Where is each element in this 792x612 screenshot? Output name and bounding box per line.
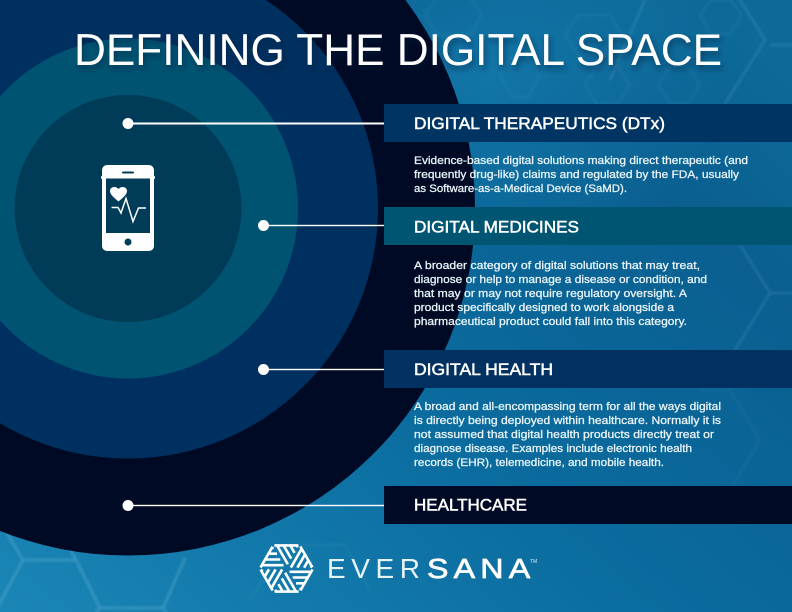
- panel: digital therapeutics: [384, 104, 792, 195]
- connector: digital health: [258, 364, 384, 375]
- heading: healthcare: HEALTHCARE: [414, 496, 527, 514]
- heading: digital health: DIGITAL HEALTH: [414, 361, 553, 379]
- logo: EVERSANA wordmark: SANA: [427, 554, 535, 584]
- text: digital medicines description: product specifically designed to work alongside a: [414, 302, 675, 314]
- text: digital medicines description: diagnose or help to manage a disease or condition, and: [414, 274, 707, 286]
- text: digital medicines description: A broader category of digital solutions that may treat,: [414, 260, 700, 272]
- text: digital medicines description: [414, 260, 707, 328]
- icon: smartphone with heart and pulse: [101, 165, 155, 251]
- text: digital therapeutics description: [414, 155, 748, 195]
- circle: digital therapeutics: [14, 95, 242, 322]
- title: DEFINING THE DIGITAL SPACE: [74, 26, 722, 75]
- text: digital health description: [414, 401, 722, 469]
- text: digital health description: records (EHR), telemedicine, and mobile health.: [414, 457, 664, 469]
- connector: healthcare: [122, 500, 384, 511]
- logo: EVERSANA mark: [255, 535, 318, 602]
- text: digital medicines description: that may or may not require regulatory oversight. A: [414, 288, 688, 300]
- text: digital health description: is directly being deployed within healthcare. Normally it is: [414, 415, 722, 427]
- circle: healthcare: [0, 0, 475, 556]
- text: digital therapeutics description: frequently drug-like) claims and regulated by the FDA, usually: [414, 169, 740, 181]
- connector: digital medicines: [258, 220, 384, 231]
- logo: EVERSANA wordmark: EVER: [327, 553, 420, 584]
- panel: digital health: [384, 350, 792, 469]
- text: digital medicines description: pharmaceutical product could fall into this category.: [414, 316, 687, 328]
- circle: digital health: [0, 0, 378, 458]
- text: digital health description: diagnose disease. Examples include electronic health: [414, 443, 692, 455]
- concentric circles diagram: [0, 0, 475, 556]
- heading: digital therapeutics: DIGITAL THERAPEUTICS (DTx): [414, 115, 665, 133]
- circle: digital medicines: [0, 38, 298, 378]
- panel: digital medicines: [384, 207, 792, 328]
- logo: EVERSANA wordmark: [327, 553, 537, 584]
- text: digital health description: A broad and all-encompassing term for all the ways digital: [414, 401, 721, 413]
- panel: healthcare: [384, 486, 792, 524]
- text: digital health description: not assumed that digital health products directly treat or: [414, 429, 714, 441]
- connector: digital therapeutics: [122, 118, 384, 129]
- text: digital therapeutics description: Evidence-based digital solutions making direct therapeutic (and: [414, 155, 748, 167]
- text: digital therapeutics description: as Software-as-a-Medical Device (SaMD).: [414, 183, 627, 195]
- heading: digital medicines: DIGITAL MEDICINES: [414, 218, 579, 236]
- logo: EVERSANA wordmark: TM: [530, 559, 537, 565]
